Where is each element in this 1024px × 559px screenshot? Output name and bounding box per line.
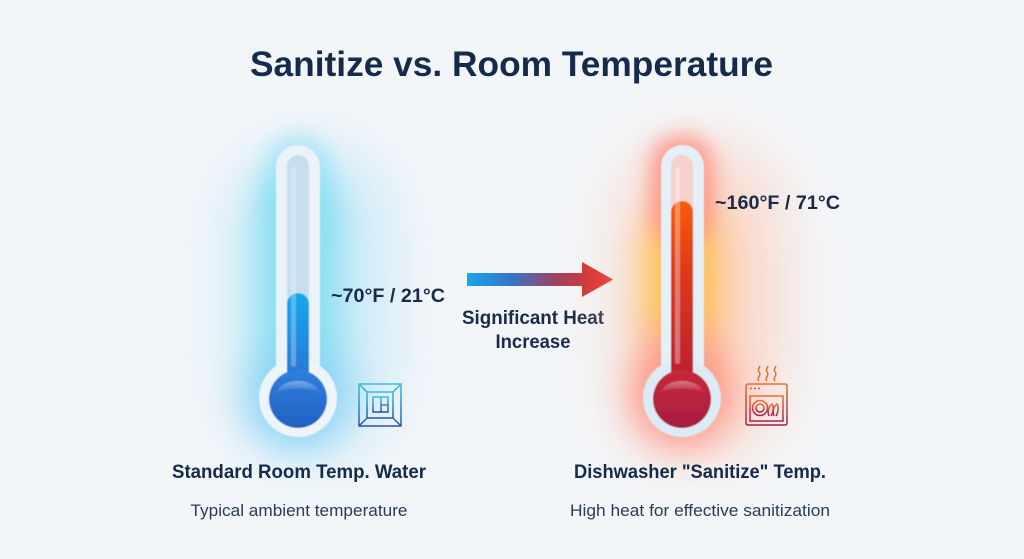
thermometer: blue [259, 145, 337, 437]
description: room: Typical ambient temperature [190, 501, 408, 520]
icon: dishwasher [746, 366, 787, 425]
thermometer: red [643, 145, 721, 437]
temperature label: sanitize: ~160°F / 71°C [715, 193, 840, 214]
arrow: heat increase [467, 262, 613, 297]
glow: red [625, 135, 775, 450]
temperature label: room: ~70°F / 21°C [331, 286, 445, 307]
heading: sanitize: Dishwasher "Sanitize" Temp. [574, 462, 826, 483]
arrow label: Significant Heat [462, 308, 605, 329]
icon: room [359, 384, 401, 426]
title: Sanitize vs. Room Temperature [250, 45, 773, 84]
panel: room temperature [172, 135, 445, 520]
panel: sanitize temperature [570, 135, 840, 520]
arrow label: Increase [496, 332, 570, 353]
description: sanitize: High heat for effective sanitization [570, 501, 830, 520]
arrow label [462, 308, 605, 353]
glow: blue [235, 135, 385, 450]
heading: room: Standard Room Temp. Water [172, 462, 427, 483]
